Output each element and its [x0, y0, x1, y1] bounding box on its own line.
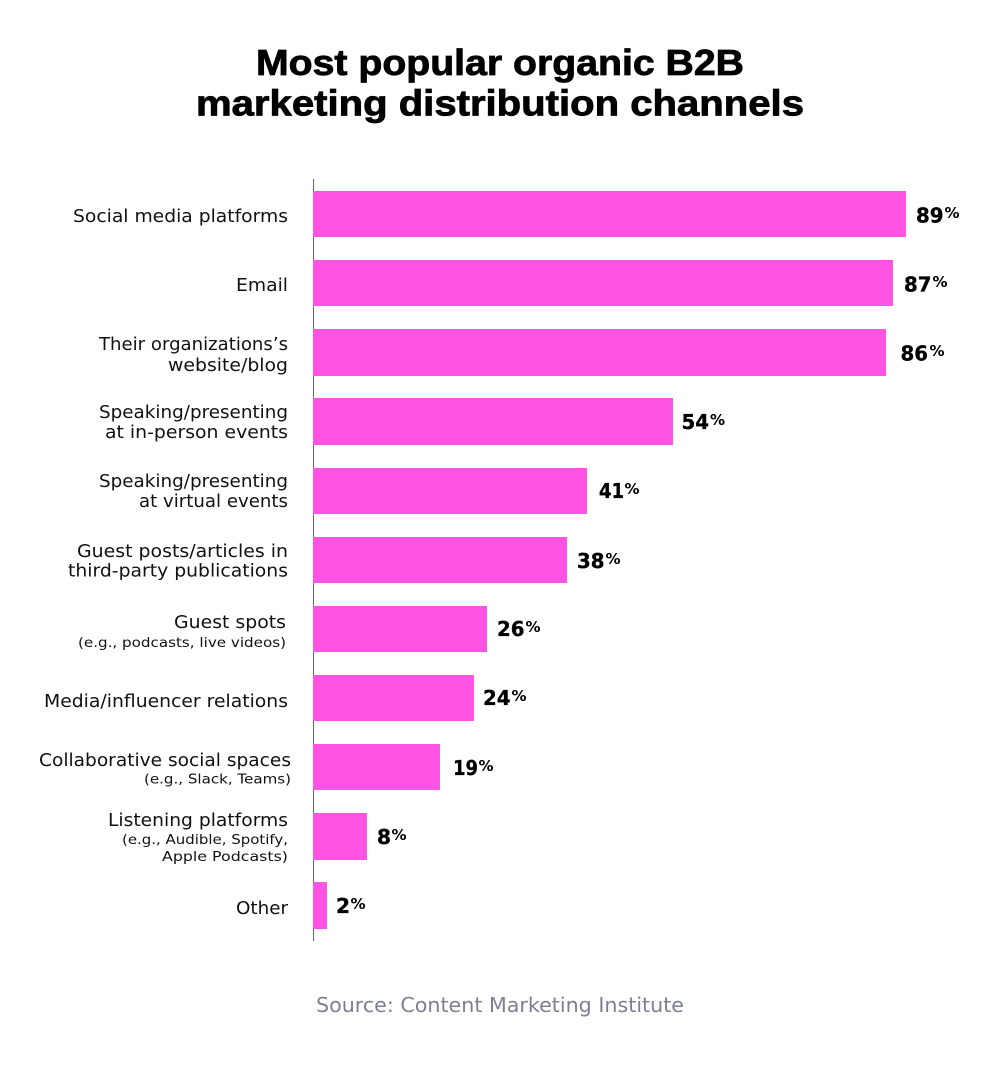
row: Listening platforms: Listening platforms	[108, 811, 288, 831]
row: Speaking/presenting at in-person events: Speaking/presenting	[99, 403, 288, 423]
row: Their organizations's website/blog: website/blog	[168, 356, 288, 376]
row: Guest posts/articles in third-party publications	[68, 537, 621, 583]
row: Guest spots: 26	[497, 617, 524, 641]
row: Speaking/presenting at virtual events	[99, 468, 640, 514]
row: Email: Email	[236, 276, 288, 296]
row: Email: 87	[904, 272, 932, 296]
row: Their organizations's website/blog: Their organizations’s	[98, 335, 288, 355]
row: Listening platforms: 8	[377, 825, 391, 849]
title	[196, 42, 804, 124]
row: Social media platforms	[73, 191, 960, 237]
row: Media/influencer relations: 24	[483, 686, 510, 710]
row: Collaborative social spaces: (e.g., Slack, Teams)	[144, 772, 291, 788]
row: Other	[236, 882, 366, 929]
row: Their organizations's website/blog: 86	[900, 342, 928, 366]
title: Most popular organic B2B	[256, 42, 744, 83]
row: Listening platforms: Apple Podcasts)	[162, 849, 288, 865]
row: Collaborative social spaces: %	[478, 757, 494, 775]
row: Speaking/presenting at in-person events: 54	[682, 410, 709, 434]
row: Speaking/presenting at in-person events: %	[710, 411, 725, 429]
row: Social media platforms: Social media platforms	[73, 207, 288, 227]
row: Speaking/presenting at virtual events: at virtual events	[139, 492, 288, 512]
title: marketing distribution channels	[196, 82, 804, 124]
row: Other: 2	[336, 894, 350, 918]
row: Collaborative social spaces: 19	[453, 756, 478, 780]
row: Media/influencer relations: %	[512, 687, 527, 705]
axis line	[313, 179, 314, 941]
row: Social media platforms: 89	[916, 204, 944, 228]
row: Listening platforms: %	[392, 826, 407, 844]
row: Speaking/presenting at in-person events: at in-person events	[105, 423, 288, 443]
source note: Source: Content Marketing Institute	[316, 993, 684, 1017]
row: Speaking/presenting at virtual events: Speaking/presenting	[99, 472, 288, 492]
row: Their organizations's website/blog	[98, 329, 945, 376]
row: Guest spots	[78, 606, 541, 652]
row: Speaking/presenting at virtual events: 41	[599, 479, 624, 503]
row: Collaborative social spaces	[39, 744, 494, 790]
row: Their organizations's website/blog: %	[930, 342, 945, 360]
row: Email	[236, 260, 948, 306]
row: Social media platforms: %	[944, 204, 960, 222]
row: Guest posts/articles in third-party publications: %	[606, 550, 621, 568]
row: Listening platforms	[108, 811, 407, 865]
row: Listening platforms: (e.g., Audible, Spotify,	[122, 832, 288, 848]
row: Speaking/presenting at virtual events: %	[624, 480, 640, 498]
row: Other: %	[350, 895, 366, 913]
row: Guest posts/articles in third-party publications: 38	[577, 549, 604, 573]
row: Guest spots: Guest spots	[174, 613, 286, 633]
row: Guest spots: %	[526, 618, 541, 636]
row: Collaborative social spaces: Collaborative social spaces	[39, 751, 291, 771]
row: Other: Other	[236, 899, 289, 919]
row: Speaking/presenting at in-person events	[99, 398, 725, 445]
row: Guest spots: (e.g., podcasts, live videos)	[78, 635, 286, 651]
row: Email: %	[932, 273, 948, 291]
row: Guest posts/articles in third-party publications: third-party publications	[68, 562, 288, 582]
row: Guest posts/articles in third-party publications: Guest posts/articles in	[77, 542, 288, 562]
row: Media/influencer relations: Media/influencer relations	[44, 692, 288, 712]
row: Media/influencer relations	[44, 675, 527, 721]
